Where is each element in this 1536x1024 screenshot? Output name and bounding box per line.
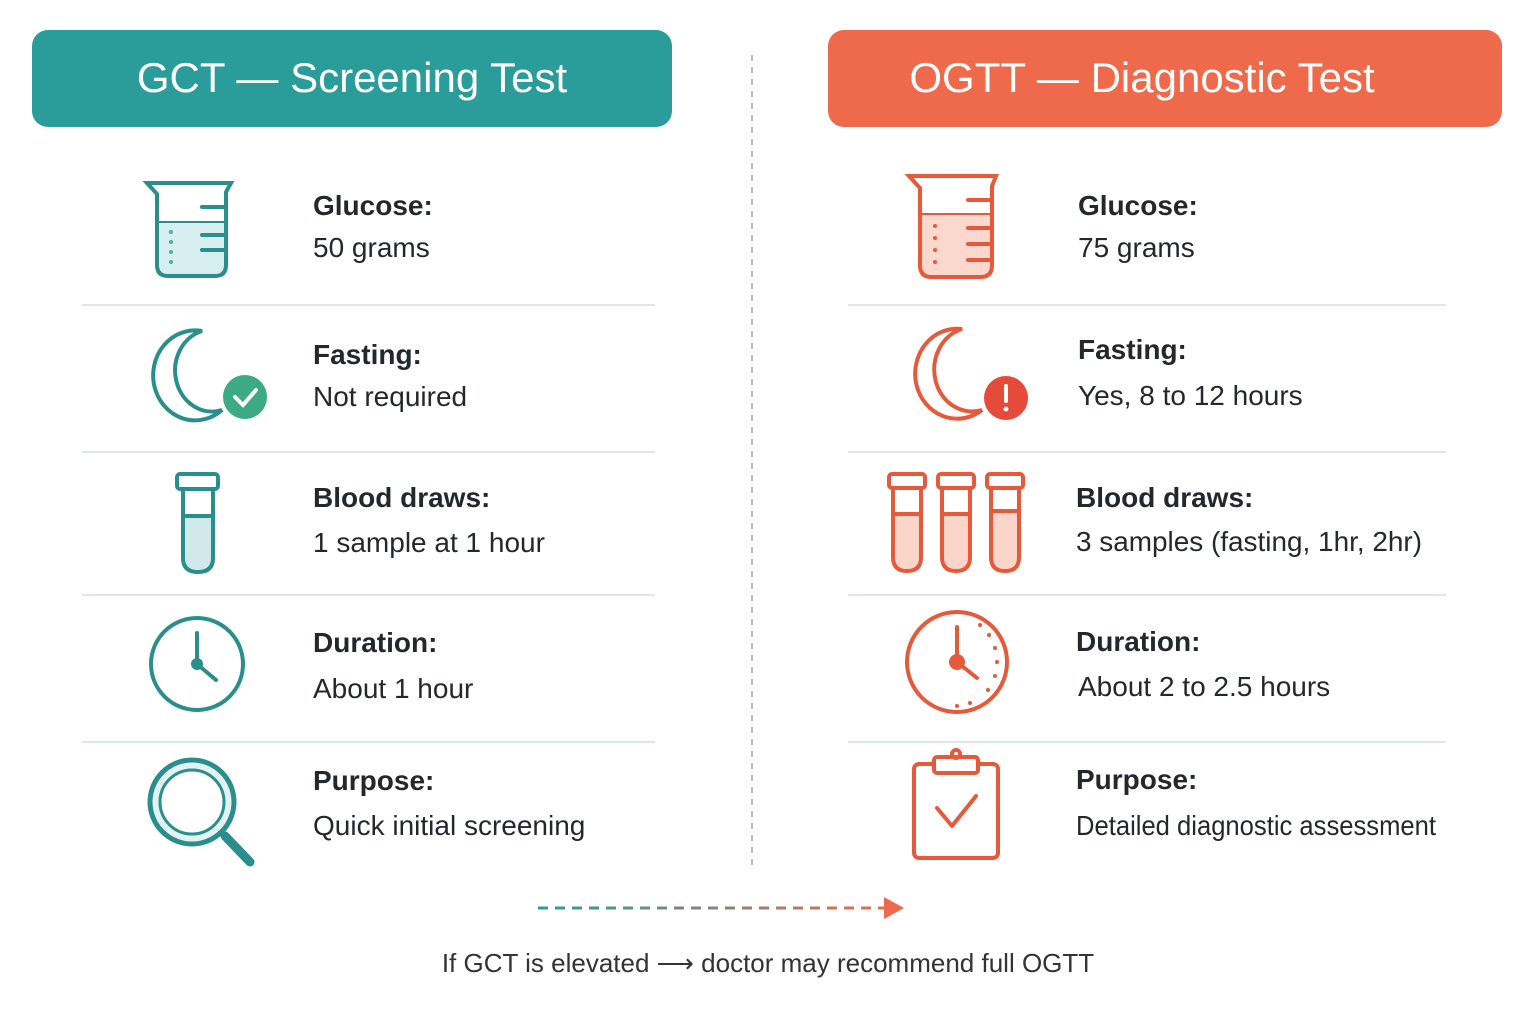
text: fasting OGTT <box>1078 334 1303 411</box>
text: glucose GCT <box>313 190 433 263</box>
text: blood draws OGTT <box>1076 482 1422 557</box>
center dashed divider <box>751 55 753 865</box>
icon: test tube <box>177 474 218 572</box>
icon: three test tubes <box>889 474 1023 571</box>
text: fasting GCT: Not required <box>313 381 467 412</box>
text: glucose OGTT: 75 grams <box>1078 232 1195 263</box>
icon: moon with check <box>153 330 267 420</box>
text: purpose OGTT: Detailed diagnostic assessment <box>1076 810 1436 841</box>
text: fasting GCT: Fasting: <box>313 339 422 370</box>
text: blood draws OGTT: Blood draws: <box>1076 482 1253 513</box>
header: GCT: GCT — Screening Test <box>137 54 567 101</box>
icon: clock teal <box>151 618 243 710</box>
icon: beaker coral <box>909 176 996 277</box>
text: duration GCT: Duration: <box>313 627 437 658</box>
text: blood draws GCT: 1 sample at 1 hour <box>313 527 545 558</box>
text: glucose OGTT: Glucose: <box>1078 190 1198 221</box>
text: blood draws OGTT: 3 samples (fasting, 1hr, 2hr) <box>1076 526 1422 557</box>
header: OGTT <box>828 30 1502 127</box>
icon: clipboard check <box>914 750 998 858</box>
text: purpose OGTT: Purpose: <box>1076 764 1197 795</box>
text: duration GCT: About 1 hour <box>313 673 473 704</box>
text: duration OGTT <box>1076 626 1330 702</box>
arrow: GCT to OGTT <box>538 897 904 919</box>
text: purpose GCT: Purpose: <box>313 765 434 796</box>
icon: clock coral <box>907 612 1007 712</box>
text: purpose OGTT <box>1076 764 1436 841</box>
text: glucose OGTT <box>1078 190 1198 263</box>
text: purpose GCT <box>313 765 585 841</box>
text: duration GCT <box>313 627 473 704</box>
text: fasting GCT <box>313 339 467 412</box>
panel: OGTT rows <box>889 176 1436 858</box>
panel: GCT rows <box>147 183 585 862</box>
text: blood draws GCT: Blood draws: <box>313 482 490 513</box>
text: blood draws GCT <box>313 482 545 558</box>
icon: moon with alert <box>915 329 1028 420</box>
text: duration OGTT: Duration: <box>1076 626 1200 657</box>
footer note: If GCT is elevated ⟶ doctor may recommend full OGTT <box>442 948 1094 978</box>
text: glucose GCT: Glucose: <box>313 190 433 221</box>
header: OGTT: OGTT — Diagnostic Test <box>909 54 1375 101</box>
text: fasting OGTT: Fasting: <box>1078 334 1187 365</box>
icon: magnifier <box>150 760 250 862</box>
icon: beaker teal <box>147 183 231 276</box>
text: duration OGTT: About 2 to 2.5 hours <box>1078 671 1330 702</box>
text: purpose GCT: Quick initial screening <box>313 810 585 841</box>
text: fasting OGTT: Yes, 8 to 12 hours <box>1078 380 1303 411</box>
header: GCT <box>32 30 672 127</box>
text: glucose GCT: 50 grams <box>313 232 430 263</box>
